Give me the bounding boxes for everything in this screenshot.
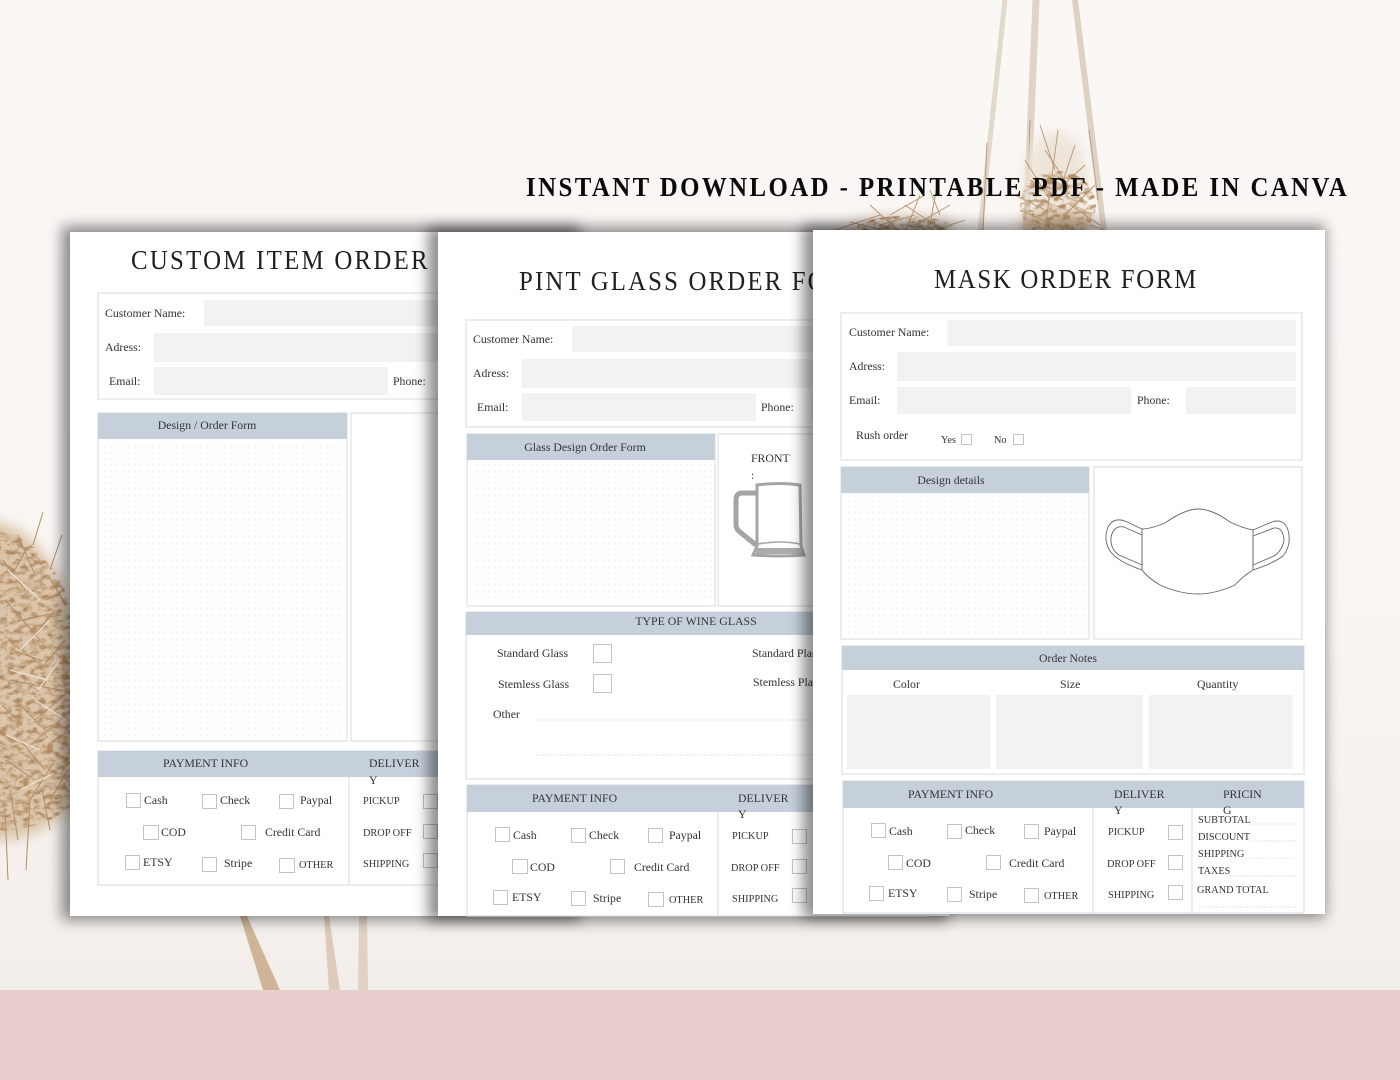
- payment, delivery and pricing panel: SHIPPING: [1108, 890, 1155, 901]
- payment panel: Check: [589, 828, 619, 842]
- customer details: [841, 313, 1302, 460]
- payment panel: OTHER: [669, 895, 703, 906]
- payment panel: DELIVER: [738, 791, 789, 805]
- hanging reed stems top: [980, 0, 1104, 232]
- payment panel: ETSY: [143, 855, 173, 869]
- customer details: [98, 293, 558, 399]
- payment panel: Cash: [513, 828, 537, 842]
- customer details: Adress:: [105, 340, 141, 354]
- payment, delivery and pricing panel: PRICIN: [1223, 787, 1262, 801]
- sheet shadow: mask form: [803, 225, 1325, 918]
- payment, delivery and pricing panel: [843, 781, 1304, 913]
- type of wine glass panel: Standard Glass: [497, 646, 569, 660]
- order notes panel: [842, 646, 1304, 774]
- payment, delivery and pricing panel: TAXES: [1198, 866, 1231, 877]
- payment panel: DROP OFF: [363, 828, 412, 839]
- dried plume left: [0, 512, 74, 880]
- payment panel: COD: [530, 860, 555, 874]
- customer details: No: [994, 435, 1007, 446]
- type of wine glass panel: Stemless Plastic: [753, 675, 829, 689]
- payment, delivery and pricing panel: OTHER: [1044, 891, 1078, 902]
- order notes panel: Color: [893, 677, 920, 691]
- payment, delivery and pricing panel: Credit Card: [1009, 856, 1064, 870]
- payment, delivery and pricing panel: Stripe: [969, 887, 997, 901]
- mask drawing box: [1094, 467, 1302, 639]
- design order panel: [98, 413, 347, 741]
- panel: custom item order form: [70, 232, 582, 916]
- sheet shadow: custom item form: [62, 226, 580, 920]
- type of wine glass panel: Other: [493, 707, 520, 721]
- design details panel: [841, 467, 1089, 639]
- payment panel: Credit Card: [634, 860, 689, 874]
- panel: pint glass order form: [438, 232, 950, 916]
- payment panel: PAYMENT INFO: [163, 756, 249, 770]
- order notes panel: Quantity: [1197, 677, 1238, 691]
- payment panel: Paypal: [669, 828, 702, 842]
- payment, delivery and pricing panel: PAYMENT INFO: [908, 787, 994, 801]
- design details panel: Design details: [917, 473, 985, 487]
- front glass box: FRONT: [751, 451, 790, 465]
- payment, delivery and pricing panel: G: [1223, 803, 1232, 817]
- payment panel: PICKUP: [363, 796, 400, 807]
- payment panel: Y: [738, 807, 747, 821]
- title: custom item: CUSTOM ITEM ORDER FORM: [131, 245, 516, 275]
- icon: face mask: [1106, 509, 1289, 594]
- payment panel: COD: [161, 825, 186, 839]
- glass design panel: [467, 434, 715, 606]
- customer details: Customer Name:: [849, 325, 929, 339]
- type of wine glass panel: Stemless Glass: [498, 677, 570, 691]
- payment panel: ETSY: [512, 890, 542, 904]
- customer details: [466, 320, 926, 427]
- payment, delivery and pricing panel: COD: [906, 856, 931, 870]
- payment panel: Y: [369, 773, 378, 787]
- payment, delivery and pricing panel: Cash: [889, 824, 913, 838]
- customer details: Customer Name:: [105, 306, 185, 320]
- payment panel: PAYMENT INFO: [532, 791, 618, 805]
- title: mask: MASK ORDER FORM: [934, 264, 1196, 294]
- payment, delivery and pricing panel: DISCOUNT: [1198, 832, 1251, 843]
- payment, delivery and pricing panel: SHIPPING: [1198, 849, 1245, 860]
- sheet shadow: pint glass form: [428, 227, 948, 921]
- design order panel: Design / Order Form: [158, 418, 256, 432]
- payment panel: [98, 751, 559, 885]
- payment panel: Credit Card: [265, 825, 320, 839]
- payment, delivery and pricing panel: Paypal: [1044, 824, 1077, 838]
- title: pint glass: PINT GLASS ORDER FORM: [519, 266, 869, 296]
- payment panel: DROP OFF: [731, 863, 780, 874]
- payment panel: SHIPPING: [363, 859, 410, 870]
- type of wine glass panel: TYPE OF WINE GLASS: [635, 614, 757, 628]
- order notes panel: Size: [1060, 677, 1080, 691]
- panel: mask order form: [813, 230, 1325, 914]
- glass design panel: Glass Design Order Form: [524, 440, 646, 454]
- empty design box: [351, 413, 558, 741]
- payment panel: Stripe: [224, 856, 252, 870]
- payment panel: Check: [220, 793, 250, 807]
- customer details: Rush order: [856, 428, 908, 442]
- payment panel: DELIVER: [369, 756, 420, 770]
- payment, delivery and pricing panel: Y: [1114, 803, 1123, 817]
- customer details: Adress:: [849, 359, 885, 373]
- payment panel: PICKUP: [732, 831, 769, 842]
- payment panel: SHIPPING: [732, 894, 779, 905]
- reed stems bottom: [240, 916, 368, 990]
- order notes panel: Order Notes: [1039, 651, 1097, 665]
- customer details: Phone:: [1137, 393, 1170, 407]
- customer details: Phone:: [761, 400, 794, 414]
- payment, delivery and pricing panel: Check: [965, 823, 995, 837]
- payment panel: Paypal: [300, 793, 333, 807]
- payment, delivery and pricing panel: DELIVER: [1114, 787, 1165, 801]
- dried plumes top right: [835, 125, 1130, 250]
- customer details: Phone:: [393, 374, 426, 388]
- customer details: Adress:: [473, 366, 509, 380]
- payment panel: Cash: [144, 793, 168, 807]
- front glass box: :: [751, 468, 754, 482]
- payment panel: [467, 785, 928, 916]
- customer details: Yes: [941, 435, 956, 446]
- payment panel: OTHER: [299, 860, 333, 871]
- payment, delivery and pricing panel: DROP OFF: [1107, 859, 1156, 870]
- type of wine glass panel: [466, 612, 926, 779]
- type of wine glass panel: Standard Plastic: [752, 646, 828, 660]
- payment, delivery and pricing panel: SUBTOTAL: [1198, 815, 1251, 826]
- customer details: Email:: [477, 400, 508, 414]
- payment, delivery and pricing panel: PICKUP: [1108, 827, 1145, 838]
- payment panel: Stripe: [593, 891, 621, 905]
- customer details: Email:: [109, 374, 140, 388]
- payment, delivery and pricing panel: GRAND TOTAL: [1197, 885, 1269, 896]
- bottom pink band: [0, 990, 1400, 1080]
- headline: INSTANT DOWNLOAD - PRINTABLE PDF - MADE IN CANVA: [526, 172, 1347, 202]
- customer details: Customer Name:: [473, 332, 553, 346]
- payment, delivery and pricing panel: ETSY: [888, 886, 918, 900]
- customer details: Email:: [849, 393, 880, 407]
- icon: beer mug: [736, 484, 804, 556]
- front glass box: [718, 434, 926, 606]
